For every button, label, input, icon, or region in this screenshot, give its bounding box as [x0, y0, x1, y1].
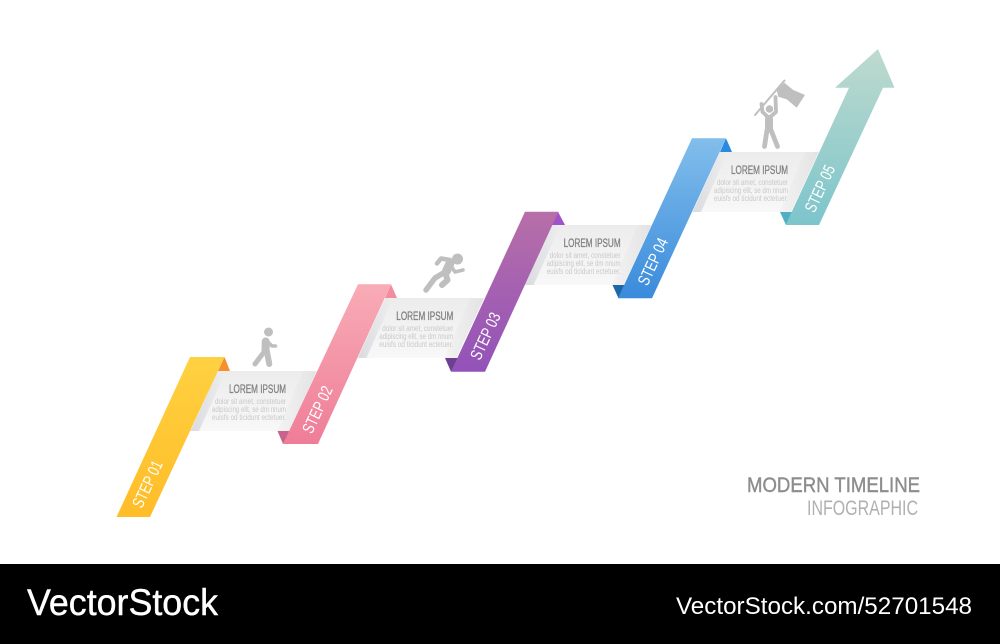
panel: lorem ipsum 4: adipiscing elit, se dm nnum: [714, 186, 788, 195]
panel: lorem ipsum 4: dolor sit amet, constetuer: [717, 178, 788, 187]
panel: lorem ipsum 4: LOREM IPSUM: [731, 165, 788, 177]
panel: lorem ipsum 2: [358, 298, 484, 358]
panel: lorem ipsum 1: [190, 371, 317, 431]
title: modern timeline infographic: MODERN TIMELINE: [747, 473, 920, 497]
icon: running figure: [426, 254, 463, 290]
title: modern timeline infographic: INFOGRAPHIC: [807, 497, 918, 520]
ribbon: step 04: STEP 04: [635, 235, 672, 288]
icon: figure holding flag: [755, 80, 805, 146]
arrow: step 05: STEP 05: [802, 162, 839, 215]
watermark bar: VectorStock.com/52701548: [676, 593, 972, 620]
panel: lorem ipsum 2: LOREM IPSUM: [396, 311, 453, 323]
icon: walking figure: [255, 328, 276, 364]
panel: lorem ipsum 3: LOREM IPSUM: [564, 238, 621, 250]
panel: lorem ipsum 3: dolor sit amet, constetuer: [550, 251, 621, 260]
title: modern timeline infographic: [747, 473, 920, 520]
ribbon: step 01: [116, 357, 230, 517]
panel: lorem ipsum 4: [692, 152, 819, 212]
watermark bar: VectorStock: [27, 582, 218, 623]
ribbon: step 04: [612, 138, 732, 298]
panel: lorem ipsum 3: euisfs od ticidunt ectetuer.: [547, 267, 621, 276]
ribbon: step 01: STEP 01: [129, 458, 167, 511]
panel: lorem ipsum 2: euisfs od ticidunt ectetuer.: [379, 340, 453, 349]
arrow: step 05: [780, 49, 894, 225]
panel: lorem ipsum 2: adipiscing elit, se dm nnum: [379, 332, 453, 341]
panel: lorem ipsum 1: dolor sit amet, constetuer: [215, 397, 286, 406]
watermark bar: [0, 564, 1000, 644]
panel: lorem ipsum 3: adipiscing elit, se dm nnum: [547, 259, 621, 268]
ribbon: step 03: [445, 212, 565, 372]
ribbon: step 03: STEP 03: [467, 310, 505, 363]
ribbon: step 02: [278, 284, 397, 444]
panel: lorem ipsum 3: [525, 225, 651, 285]
ribbon: step 02: STEP 02: [299, 383, 337, 436]
panel: lorem ipsum 2: dolor sit amet, constetuer: [382, 324, 454, 333]
panel: lorem ipsum 1: adipiscing elit, se dm nnum: [212, 405, 286, 414]
panel: lorem ipsum 4: euisfs od ticidunt ectetuer.: [714, 194, 788, 203]
panel: lorem ipsum 1: LOREM IPSUM: [229, 384, 286, 396]
panel: lorem ipsum 1: euisfs od ticidunt ectetuer.: [212, 413, 286, 422]
